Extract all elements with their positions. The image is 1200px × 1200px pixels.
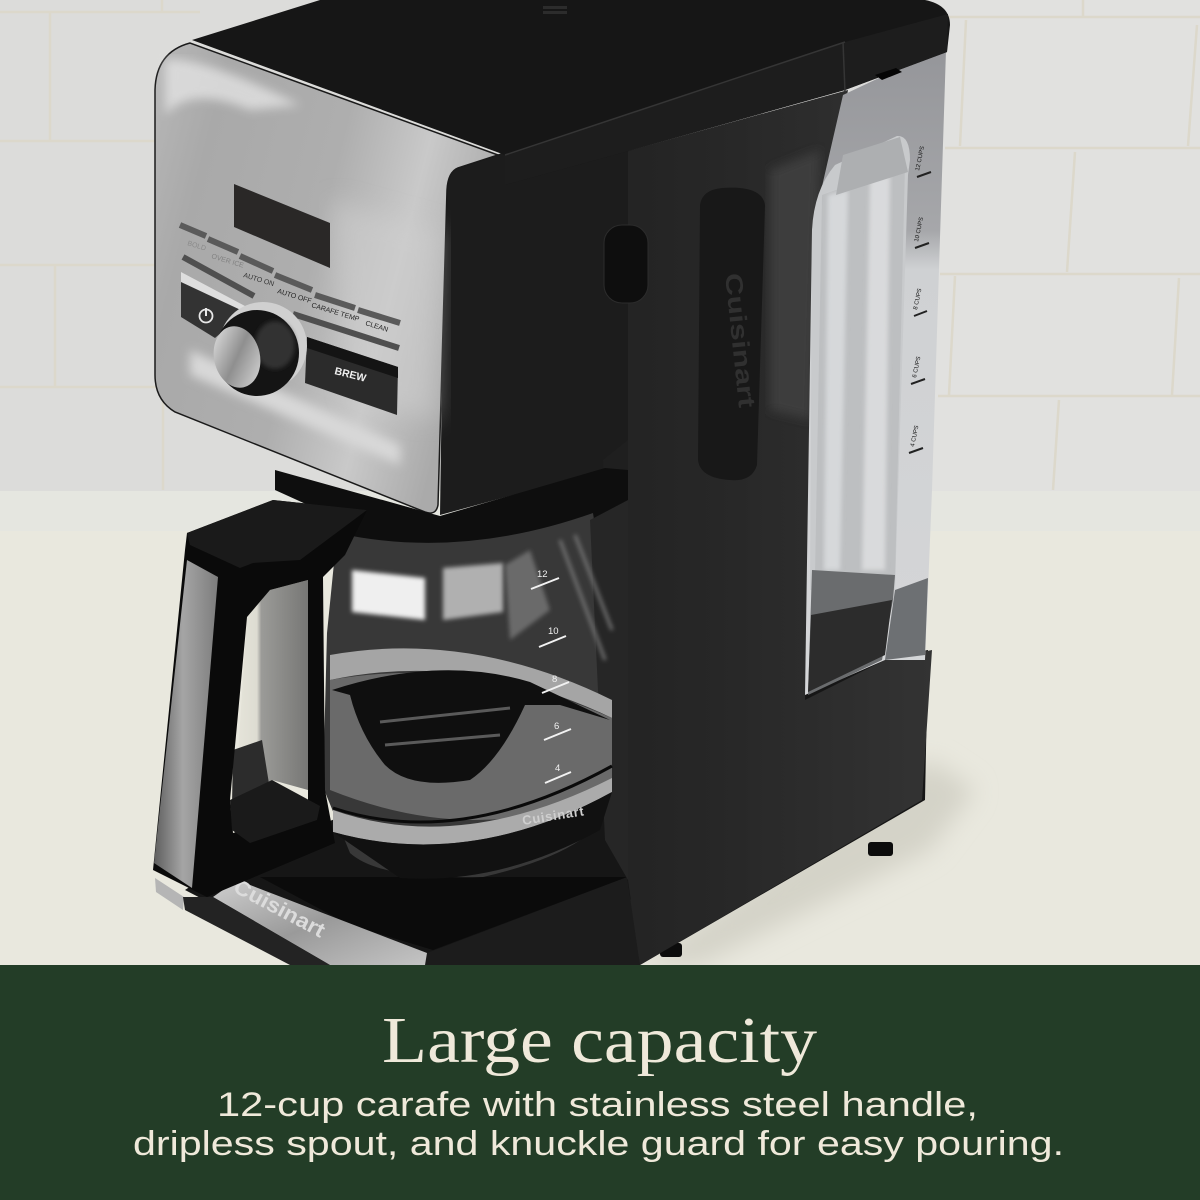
labels	[186, 240, 389, 334]
water reservoir	[805, 50, 946, 695]
carafe handle	[153, 500, 367, 897]
description: 12-cup carafe with stainless steel handle,	[217, 1086, 978, 1124]
cup markings: 10 CUPS	[914, 217, 925, 242]
labels: CARAFE TEMP	[310, 302, 360, 324]
lid	[192, 0, 950, 185]
control panel	[155, 43, 498, 513]
brand on base: Cuisinart	[230, 875, 329, 942]
carafe	[275, 468, 628, 880]
countertop	[0, 491, 1200, 966]
cup markings	[909, 146, 931, 453]
side sheen	[770, 150, 820, 420]
description: dripless spout, and knuckle guard for easy pouring.	[133, 1125, 1064, 1163]
carafe: Cuisinart	[521, 803, 585, 828]
carafe marks: 4	[555, 763, 560, 774]
cup markings: 4 CUPS	[910, 425, 920, 447]
carafe marks: 10	[548, 626, 559, 637]
cup markings: 6 CUPS	[912, 356, 922, 378]
housing side	[440, 150, 628, 515]
side oval button	[604, 225, 648, 303]
main side body	[505, 90, 932, 965]
tiled wall background	[0, 0, 1200, 492]
labels: CLEAN	[364, 320, 389, 334]
carafe marks: 8	[552, 674, 557, 685]
window	[810, 136, 910, 590]
coffee maker	[153, 0, 950, 965]
base	[155, 650, 930, 965]
stainless foot	[155, 878, 184, 910]
carafe marks: 12	[537, 569, 548, 580]
side brand badge	[698, 188, 765, 480]
description	[133, 1086, 1064, 1163]
labels: AUTO OFF	[276, 288, 312, 305]
caption band	[0, 965, 1200, 1200]
heading: Large capacity	[382, 1004, 817, 1077]
glass	[323, 513, 612, 877]
cup markings: 8 CUPS	[913, 288, 923, 310]
brew button	[305, 337, 398, 415]
cup markings: 12 CUPS	[915, 146, 926, 171]
stainless base strip	[213, 880, 427, 965]
brew head and neck	[275, 468, 628, 548]
labels: AUTO ON	[242, 272, 275, 288]
display	[234, 184, 330, 268]
indicator strip	[180, 225, 400, 323]
carafe marks	[531, 569, 571, 783]
power button	[181, 272, 245, 338]
side brand badge: Cuisinart	[719, 272, 760, 409]
labels: OVER ICE	[210, 253, 245, 270]
labels: BOLD	[186, 240, 207, 252]
brew button: BREW	[333, 365, 367, 385]
carafe marks: 6	[554, 721, 559, 732]
feet	[660, 842, 893, 957]
slot bars	[183, 257, 399, 348]
knob	[208, 302, 307, 396]
